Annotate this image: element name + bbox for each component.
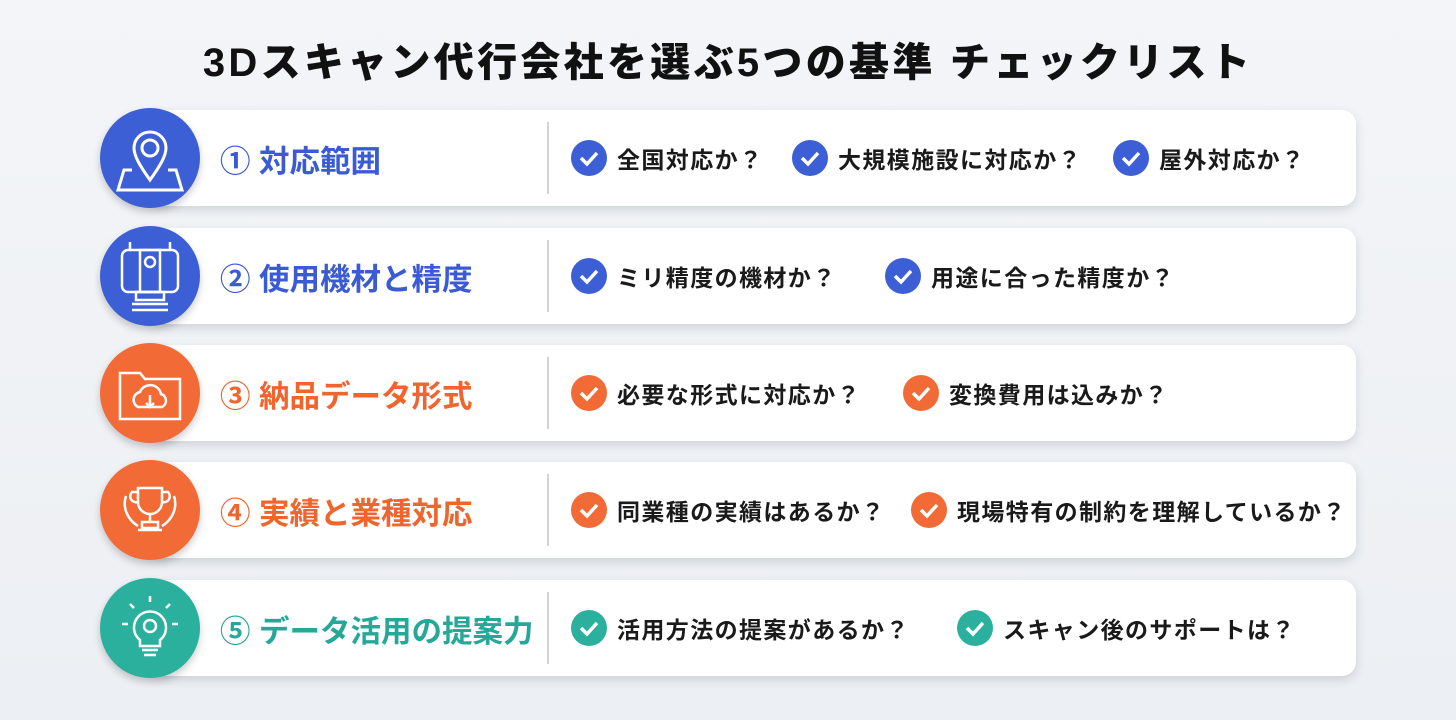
- check item: 変換費用は込みか？: [949, 382, 1169, 408]
- check item: [571, 140, 763, 176]
- check item: [1113, 140, 1305, 176]
- check item: 全国対応か？: [617, 147, 763, 173]
- icon: lightbulb: [100, 578, 200, 678]
- icon: cloud folder: [100, 343, 200, 443]
- check item: 必要な形式に対応か？: [617, 382, 861, 408]
- panel: row 2 使用機材と精度: [96, 226, 1360, 334]
- check item: [571, 375, 861, 411]
- panel: row 3 納品データ形式: [96, 343, 1360, 451]
- check item: [903, 375, 1169, 411]
- check item: [911, 492, 1347, 528]
- check item: ミリ精度の機材か？: [617, 265, 837, 291]
- title: 3Dスキャン代行会社を選ぶ5つの基準 チェックリスト: [203, 41, 1253, 85]
- check item: 大規模施設に対応か？: [838, 147, 1082, 173]
- check item: [792, 140, 1082, 176]
- check item: 屋外対応か？: [1159, 147, 1305, 173]
- heading: ① 対応範囲: [220, 145, 381, 179]
- heading: ③ 納品データ形式: [220, 380, 472, 414]
- heading: ② 使用機材と精度: [220, 263, 472, 297]
- check item: 現場特有の制約を理解しているか？: [957, 499, 1347, 525]
- check item: [571, 258, 837, 294]
- check item: 活用方法の提案があるか？: [617, 617, 910, 643]
- check item: [885, 258, 1175, 294]
- panel: row 5 データ活用の提案力: [96, 578, 1360, 686]
- icon: trophy: [100, 460, 200, 560]
- panel: row 4 実績と業種対応: [96, 460, 1360, 568]
- check item: [571, 492, 885, 528]
- check item: スキャン後のサポートは？: [1003, 617, 1296, 643]
- check item: 用途に合った精度か？: [931, 265, 1175, 291]
- icon: scanner: [100, 226, 200, 326]
- panel: row 1 対応範囲: [96, 108, 1360, 216]
- check item: [571, 610, 910, 646]
- icon: map pin: [100, 108, 200, 208]
- check item: [957, 610, 1296, 646]
- check item: 同業種の実績はあるか？: [617, 499, 885, 525]
- heading: ⑤ データ活用の提案力: [220, 615, 533, 649]
- heading: ④ 実績と業種対応: [220, 497, 472, 531]
